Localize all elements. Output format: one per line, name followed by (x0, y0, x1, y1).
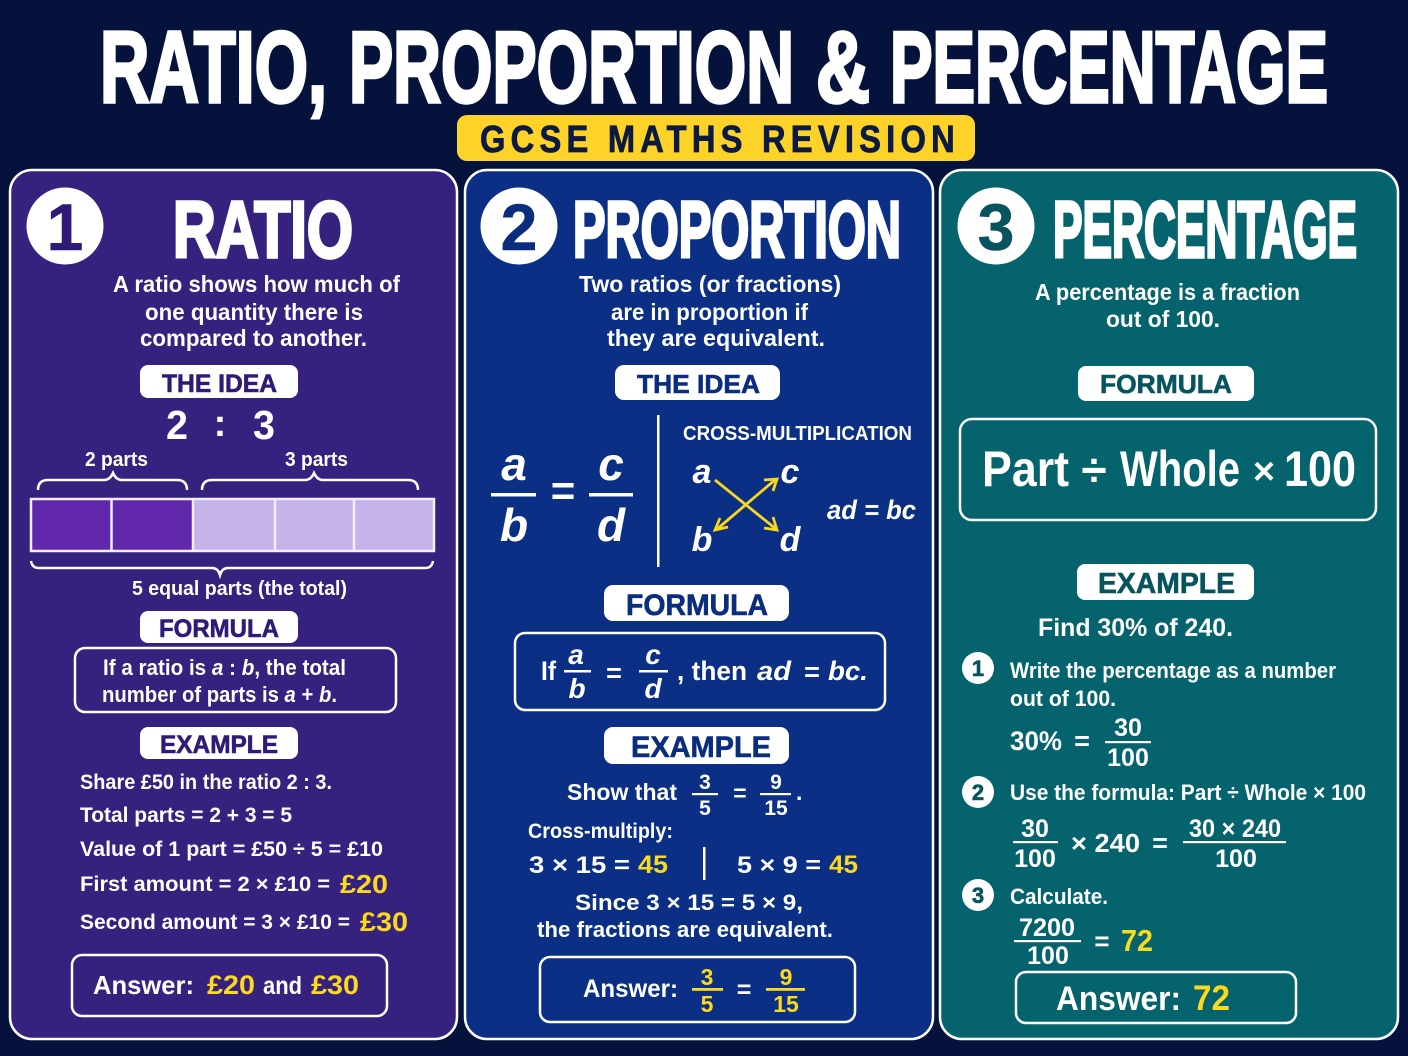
proportion worked example (528, 771, 858, 942)
proportion definition: they are equivalent. (607, 325, 825, 351)
step 3: Calculate. (1010, 884, 1108, 909)
cross-multiplication diagram: CROSS-MULTIPLICATION (683, 423, 912, 445)
fraction equation a/b = c/d: c (598, 438, 624, 490)
percentage formula box: 100 (1284, 441, 1356, 497)
proportion formula box: = (606, 658, 622, 688)
label: formula: FORMULA (1100, 369, 1232, 399)
percentage formula box: ÷ (1081, 444, 1107, 496)
percentage formula box: Whole (1120, 441, 1240, 497)
proportion formula box: ad (757, 656, 792, 686)
label: formula (1078, 366, 1254, 401)
step 2: × 240 (1071, 828, 1140, 858)
part bar diagram: 2 parts (85, 449, 148, 471)
part bar diagram: 5 equal parts (the total) (132, 578, 347, 600)
step 3: 3 (972, 883, 984, 908)
fraction equation a/b = c/d: b (500, 499, 528, 551)
percentage formula box (960, 419, 1376, 520)
vertical divider (657, 415, 660, 567)
heading: ratio: RATIO (173, 185, 353, 274)
percentage definition: A percentage is a fraction (1035, 279, 1300, 305)
proportion formula box: = (804, 657, 820, 687)
title: PROPORTION (349, 12, 794, 124)
label: the idea: THE IDEA (637, 369, 760, 399)
ratio worked example (80, 771, 408, 937)
proportion answer box: 9 (780, 964, 792, 990)
heading: proportion: PROPORTION (573, 185, 901, 274)
fraction equation a/b = c/d (491, 438, 633, 551)
label: the idea (140, 365, 298, 398)
proportion worked example: . (796, 779, 802, 805)
proportion answer box: 5 (701, 991, 714, 1017)
fraction equation a/b = c/d: d (597, 499, 626, 551)
step 3: = (1094, 926, 1110, 956)
label: example: EXAMPLE (160, 731, 278, 759)
panel: percentage (940, 170, 1398, 1039)
cross-multiplication diagram: b (692, 521, 712, 559)
proportion answer box: = (737, 976, 751, 1004)
cross-multiplication diagram (683, 423, 916, 559)
step 2 (962, 776, 1366, 873)
step 2: = (1152, 828, 1168, 858)
step 1: 100 (1107, 744, 1149, 772)
step 3 (962, 879, 1153, 970)
proportion worked example: 9 (770, 771, 782, 794)
proportion formula box: b (568, 673, 586, 704)
number badge 1: 1 (47, 190, 83, 264)
number badge 2: 2 (501, 190, 537, 264)
number badge 3: 3 (978, 190, 1014, 264)
step 2: Use the formula: Part ÷ Whole × 100 (1010, 780, 1366, 805)
ratio formula box (75, 648, 396, 712)
label: example: EXAMPLE (631, 731, 771, 764)
ratio formula box: number of parts is a + b. (102, 682, 337, 707)
title: & (816, 12, 870, 124)
panel: proportion (465, 170, 933, 1039)
percentage formula box: × (1253, 451, 1275, 493)
cross-multiplication diagram: c (781, 453, 800, 491)
label: the idea (615, 365, 780, 400)
step 1: 30 (1114, 714, 1142, 742)
ratio definition: one quantity there is (145, 299, 363, 325)
ratio worked example: First amount = 2 × £10 = (80, 873, 330, 896)
ratio definition: compared to another. (140, 325, 367, 351)
proportion worked example: 5 (699, 797, 711, 820)
proportion formula box: , then (677, 656, 747, 686)
step 2: 2 (972, 780, 984, 805)
step 3: 7200 (1019, 914, 1075, 942)
step 1: Write the percentage as a number (1010, 658, 1336, 683)
proportion formula box: If (541, 656, 557, 686)
proportion worked example: 5 × 9 = (737, 852, 821, 879)
proportion answer box: 15 (773, 991, 799, 1017)
ratio worked example: Second amount = 3 × £10 = (80, 911, 350, 934)
label: formula: FORMULA (159, 615, 279, 643)
number badge 1 (26, 188, 104, 264)
percentage answer box: 72 (1193, 979, 1230, 1018)
step 1 (962, 652, 1336, 772)
proportion worked example: Show that (567, 779, 677, 805)
label: example (604, 727, 789, 764)
ratio 2 : 3: : (214, 403, 226, 445)
cross-multiplication diagram: a (693, 453, 711, 491)
step 3: 100 (1027, 942, 1069, 970)
proportion formula box: a (568, 639, 584, 670)
proportion definition: are in proportion if (611, 299, 808, 325)
step 2: 30 (1021, 815, 1049, 843)
proportion worked example: 15 (764, 797, 788, 820)
step 2: 100 (1215, 845, 1257, 873)
step 1: 30% (1010, 726, 1062, 756)
percentage formula box: Part (982, 441, 1069, 497)
ratio 2 : 3 (166, 402, 275, 448)
percentage definition (1035, 279, 1300, 332)
percentage definition: out of 100. (1106, 306, 1220, 332)
ratio 2 : 3: 2 (166, 402, 188, 448)
proportion worked example: the fractions are equivalent. (537, 917, 833, 942)
ratio worked example: Share £50 in the ratio 2 : 3. (80, 771, 332, 794)
proportion formula box: bc. (828, 656, 868, 686)
ratio worked example: Value of 1 part = £50 ÷ 5 = £10 (80, 838, 383, 861)
proportion answer box: Answer: (583, 975, 678, 1003)
proportion answer box: 3 (701, 964, 713, 990)
title: RATIO, (100, 12, 327, 124)
proportion worked example: 3 × 15 = (529, 852, 630, 879)
fraction equation a/b = c/d: a (501, 438, 527, 490)
step 1: 1 (972, 656, 984, 681)
step 1: = (1074, 726, 1090, 756)
cross-multiplication diagram: ad = bc (827, 495, 916, 525)
icon: crossing arrows (715, 479, 777, 530)
proportion worked example: 45 (638, 851, 668, 879)
ratio formula box: If a ratio is a : b, the total (103, 655, 346, 680)
step 2: 30 × 240 (1189, 815, 1281, 843)
percentage answer box: Answer: (1056, 980, 1181, 1018)
ratio definition (113, 271, 400, 351)
ratio answer box (72, 955, 387, 1016)
part bar diagram (31, 449, 434, 600)
proportion worked example: Cross-multiply: (528, 820, 673, 843)
label: example: EXAMPLE (1098, 568, 1235, 600)
cross-multiplication diagram: d (780, 521, 802, 559)
ratio answer box: £30 (311, 970, 359, 1000)
ratio answer box: £20 (207, 970, 255, 1000)
ratio answer box: Answer: (93, 970, 194, 1000)
proportion definition: Two ratios (or fractions) (579, 271, 841, 297)
ratio worked example: £30 (360, 907, 408, 937)
part bar diagram: 3 parts (285, 449, 348, 471)
proportion answer box (540, 957, 855, 1022)
ratio answer box: and (263, 972, 302, 1000)
label: the idea: THE IDEA (162, 370, 277, 398)
number badge 2 (480, 188, 558, 264)
label: formula: FORMULA (626, 589, 768, 622)
proportion definition (579, 271, 841, 351)
example question: Find 30% of 240. (1038, 614, 1233, 642)
label: formula (140, 611, 298, 643)
proportion formula box: c (645, 639, 661, 670)
step 3: 72 (1121, 923, 1153, 958)
ratio worked example: Total parts = 2 + 3 = 5 (80, 804, 292, 827)
proportion worked example: 45 (829, 851, 858, 879)
subtitle banner: GCSE MATHS REVISION (480, 118, 955, 161)
fraction equation a/b = c/d: = (551, 467, 575, 514)
ratio worked example: £20 (340, 869, 388, 899)
title (100, 12, 1328, 124)
ratio 2 : 3: 3 (253, 402, 275, 448)
proportion formula box (515, 633, 885, 710)
percentage answer box (1016, 972, 1296, 1023)
proportion worked example: = (733, 780, 747, 806)
proportion formula box: d (644, 673, 662, 704)
step 2: 100 (1014, 845, 1056, 873)
ratio definition: A ratio shows how much of (113, 271, 400, 297)
proportion worked example: Since 3 × 15 = 5 × 9, (575, 890, 803, 915)
label: example (140, 727, 298, 759)
proportion worked example: 3 (699, 771, 711, 794)
number badge 3 (958, 188, 1034, 264)
panel: ratio (10, 170, 457, 1039)
step 1: out of 100. (1010, 686, 1116, 711)
